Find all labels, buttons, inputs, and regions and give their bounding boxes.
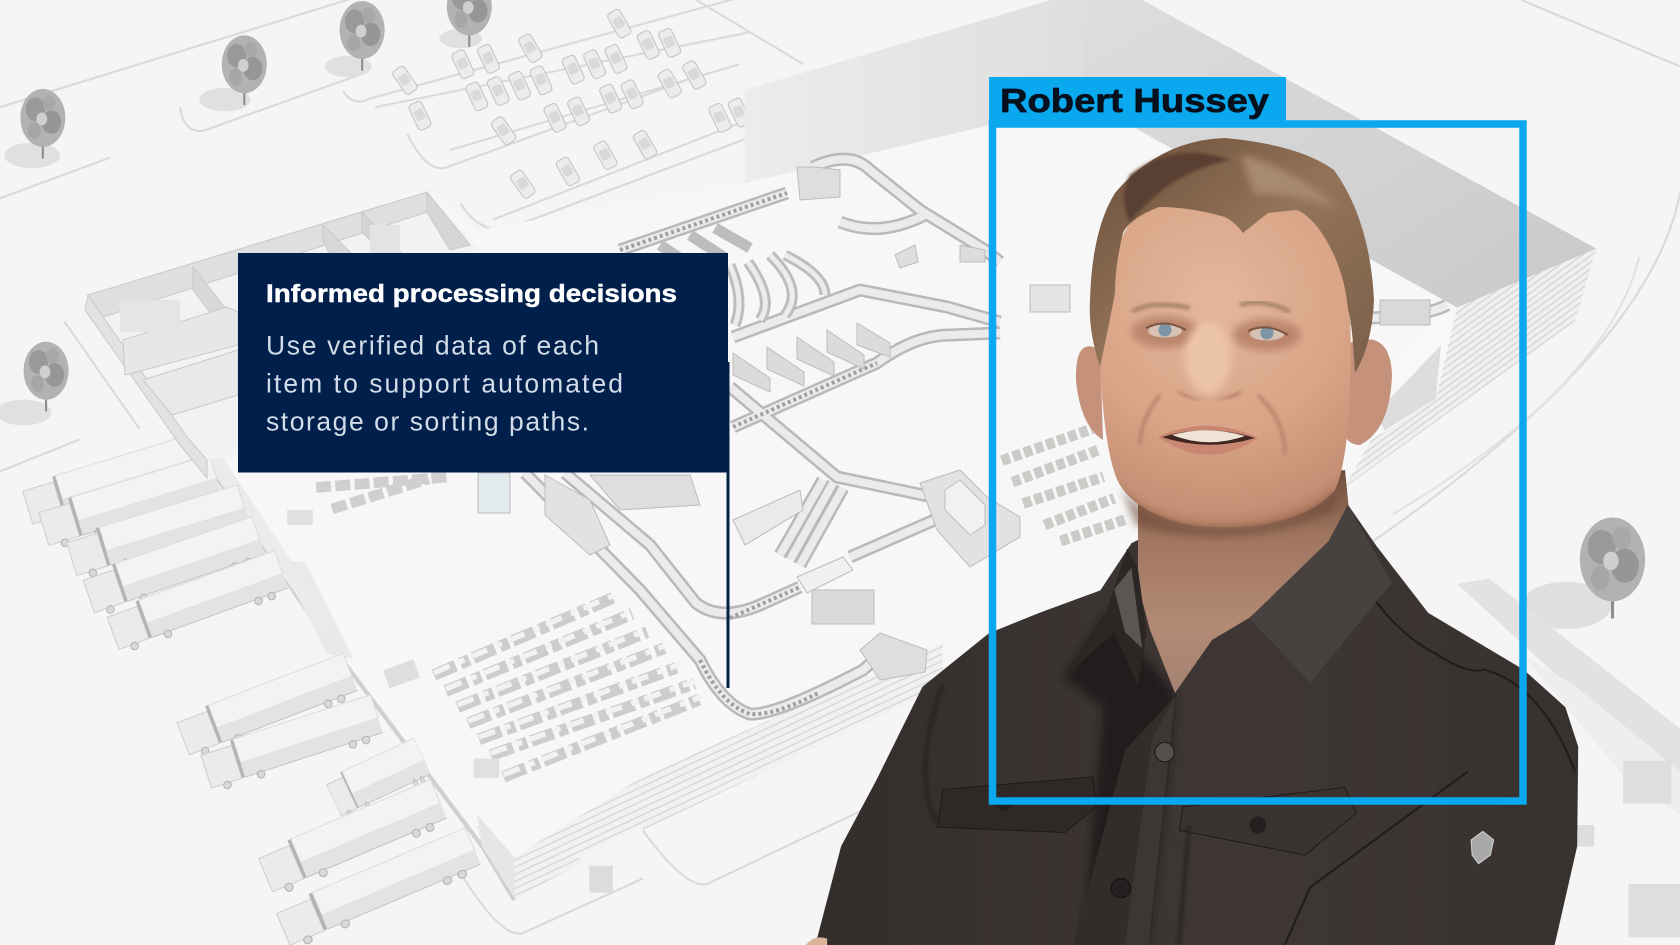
chin shadow bbox=[1120, 485, 1335, 537]
eyes bbox=[1148, 324, 1182, 338]
mouth bbox=[1158, 426, 1258, 455]
head bbox=[1090, 138, 1374, 537]
conveyors bbox=[525, 159, 1447, 714]
hair bbox=[1090, 138, 1374, 373]
building walls bbox=[188, 0, 1596, 900]
callout heading: Informed processing decisions bbox=[266, 280, 677, 308]
callout body bbox=[266, 330, 623, 436]
shirt badge bbox=[1471, 831, 1494, 864]
callout body: item to support automated bbox=[266, 368, 623, 398]
callout panel bbox=[238, 253, 728, 472]
sorter chutes bbox=[660, 228, 825, 325]
neck bbox=[1138, 470, 1350, 693]
building floor bbox=[91, 102, 1457, 898]
name tab bbox=[989, 77, 1286, 127]
shirt bbox=[806, 505, 1578, 945]
hand bbox=[806, 937, 827, 945]
callout body: storage or sorting paths. bbox=[266, 406, 589, 436]
trucks at docks bbox=[21, 434, 483, 945]
face bbox=[1100, 185, 1351, 527]
trees bbox=[0, 0, 1645, 629]
buttons bbox=[1155, 743, 1174, 762]
name frame bbox=[989, 77, 1523, 801]
outside yard items bbox=[287, 510, 1680, 938]
stations bbox=[478, 167, 1430, 680]
brows bbox=[1132, 303, 1290, 312]
name tab: Robert Hussey bbox=[1000, 83, 1269, 120]
shirt placket shadow bbox=[1064, 613, 1175, 945]
nose and cheek shadows bbox=[1185, 322, 1231, 394]
person photo bbox=[806, 138, 1578, 945]
sorting lanes bbox=[316, 477, 702, 777]
callout: informed processing decisions bbox=[238, 253, 730, 688]
callout leader line bbox=[726, 362, 730, 688]
floor racks bbox=[1002, 429, 1125, 541]
pockets bbox=[938, 777, 1096, 833]
eye sockets bbox=[1131, 316, 1199, 348]
callout body: Use verified data of each bbox=[266, 330, 599, 360]
ears bbox=[1076, 339, 1392, 445]
sleeve folds bbox=[1285, 579, 1575, 945]
shirt collar bbox=[1064, 505, 1392, 686]
offices bbox=[85, 192, 480, 478]
parking cars bbox=[391, 8, 751, 200]
